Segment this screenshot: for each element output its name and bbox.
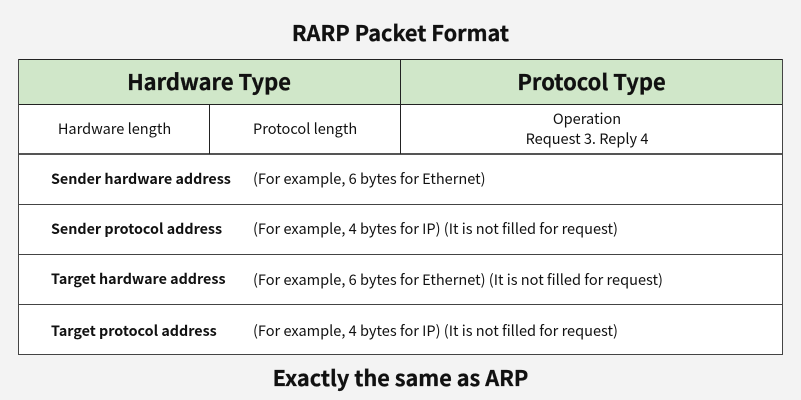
- cell: operation: Operation: [553, 108, 621, 129]
- row: target protocol address: Target protocol address: [51, 320, 217, 341]
- cell: protocol length: Protocol length: [253, 118, 357, 139]
- row: target protocol address: (For example, 4 bytes for IP) (It is not filled for request): [253, 320, 618, 341]
- row: sender hardware address: [51, 168, 486, 189]
- header cell: protocol type: [400, 59, 783, 104]
- cell: operation: [526, 108, 648, 149]
- row: target hardware address: [51, 268, 663, 290]
- row: target hardware address: (For example, 6 bytes for Ethernet) (It is not filled for request): [253, 269, 663, 290]
- cell: hardware length: Hardware length: [58, 118, 171, 139]
- row: sender hardware address: Sender hardware address: [51, 168, 231, 189]
- header cell: hardware type: Hardware Type: [127, 66, 291, 97]
- header cell: protocol type: Protocol Type: [517, 66, 666, 97]
- row: sender protocol address: [51, 218, 618, 239]
- row: sender hardware address: (For example, 6 bytes for Ethernet): [253, 168, 486, 189]
- cell: operation: Request 3. Reply 4: [526, 128, 648, 149]
- row: sender protocol address: (For example, 4 bytes for IP) (It is not filled for request): [253, 218, 618, 239]
- row: target protocol address: [51, 320, 618, 341]
- row: sender protocol address: Sender protocol address: [51, 218, 222, 239]
- footer caption: Exactly the same as ARP: [273, 362, 528, 393]
- row: target hardware address: Target hardware address: [51, 268, 226, 289]
- panel: packet table: [18, 59, 783, 355]
- title: RARP Packet Format: [292, 17, 509, 48]
- header cell: hardware type: [18, 59, 400, 104]
